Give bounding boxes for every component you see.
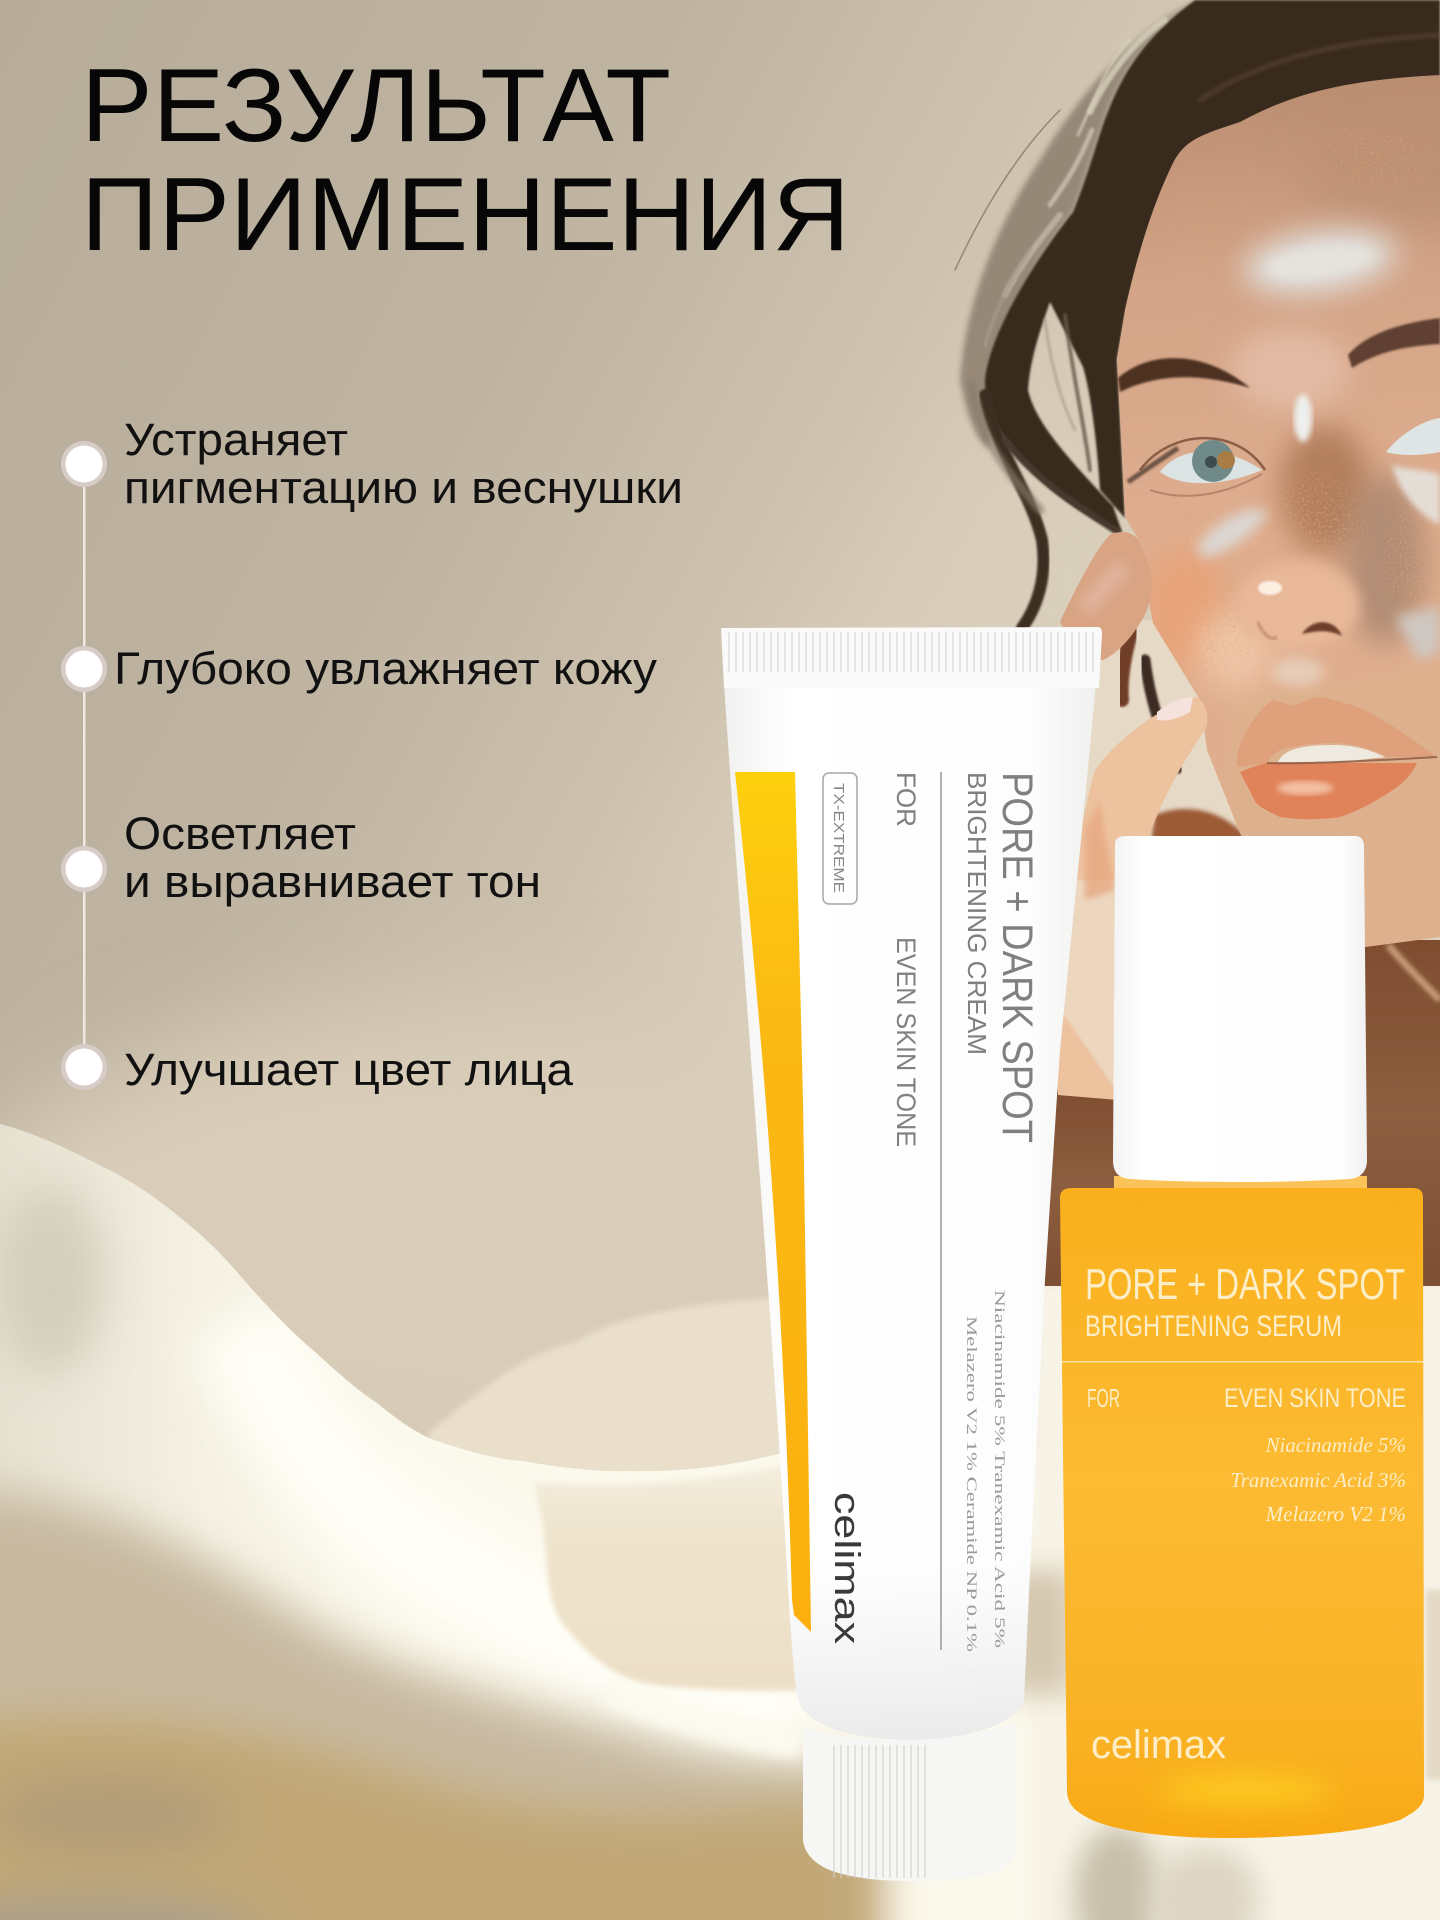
bottle ingredients: Melazero V2 1% (1265, 1502, 1406, 1526)
face skin (1117, 75, 1440, 947)
tube ingredients: Niacinamide 5% Tranexamic Acid 5% (991, 1290, 1007, 1648)
tube lower shading (782, 1560, 1032, 1740)
benefit 1: Устраняет (124, 414, 348, 465)
bottle body (1060, 1188, 1424, 1838)
teeth (1278, 745, 1385, 762)
bottle cap (1113, 836, 1367, 1182)
tube cap (803, 1722, 1016, 1881)
title: ПРИМЕНЕНИЯ (81, 157, 850, 273)
title (81, 48, 850, 273)
tube brand: celimax (827, 1492, 868, 1644)
title: РЕЗУЛЬТАТ (81, 48, 671, 164)
tube badge: TX-EXTREME (830, 783, 847, 893)
product: cream tube (721, 627, 1102, 1881)
silk lower right (1000, 1280, 1440, 1920)
tube badge (823, 773, 857, 904)
eyebrows (1118, 318, 1440, 392)
tube ingredients: Melazero V2 1% Ceramide NP 0.1% (963, 1316, 979, 1652)
nose (1236, 561, 1360, 687)
product: serum bottle (1060, 836, 1424, 1838)
bottle ingredients: Niacinamide 5% (1264, 1433, 1406, 1457)
silk shading (0, 1185, 880, 1920)
silk fabric (0, 1124, 1040, 1920)
tube product name (891, 772, 1041, 1147)
brown area behind bottle (1040, 940, 1440, 1286)
bottle label (1060, 1260, 1424, 1413)
main fold (0, 1124, 1040, 1920)
benefit 3 (61, 808, 541, 907)
yellow stripe (735, 772, 811, 1632)
hair (955, 0, 1440, 768)
photo: woman's face with freckles (955, 0, 1440, 1286)
left eye (1128, 438, 1265, 496)
lower finger and hand (1057, 697, 1207, 1100)
benefit 1: пигментацию и веснушки (124, 462, 683, 513)
face shading (1145, 110, 1440, 960)
tube crimp (721, 627, 1102, 688)
tube ingredients (963, 1290, 1007, 1652)
tube divider (940, 772, 942, 1650)
bottle ingredients (1230, 1433, 1406, 1526)
tube product name: PORE + DARK SPOT (993, 772, 1041, 1143)
white strand (610, 1692, 800, 1745)
bottle glow (1155, 1776, 1335, 1804)
right eye (1386, 418, 1440, 455)
bottle label: BRIGHTENING SERUM (1085, 1310, 1342, 1343)
bottle ingredients: Tranexamic Acid 3% (1230, 1468, 1406, 1492)
tube product name: BRIGHTENING CREAM (962, 772, 992, 1055)
timeline connector (83, 464, 86, 1067)
tube product name: FOR (891, 772, 921, 827)
freckles (1146, 132, 1440, 678)
upper finger (1060, 532, 1152, 660)
tube body (724, 684, 1096, 1740)
benefit 4: Улучшает цвет лица (124, 1044, 574, 1095)
back fold (429, 1296, 800, 1520)
bottle label: FOR (1087, 1383, 1120, 1413)
bottle brand: celimax (1091, 1723, 1226, 1767)
bottle neck (1114, 1176, 1367, 1190)
dark shadow under jaw (1149, 806, 1242, 836)
benefit 3: и выравнивает тон (124, 856, 541, 907)
backdrop behind fingers (1085, 620, 1238, 836)
benefit 3: Осветляет (124, 808, 356, 859)
forehead highlight (1197, 219, 1440, 558)
benefit 2: Глубоко увлажняет кожу (114, 643, 658, 694)
tube product name: EVEN SKIN TONE (891, 937, 921, 1147)
front fold pocket (533, 1462, 800, 1691)
lips (1237, 697, 1437, 819)
benefit 1 (61, 414, 683, 513)
